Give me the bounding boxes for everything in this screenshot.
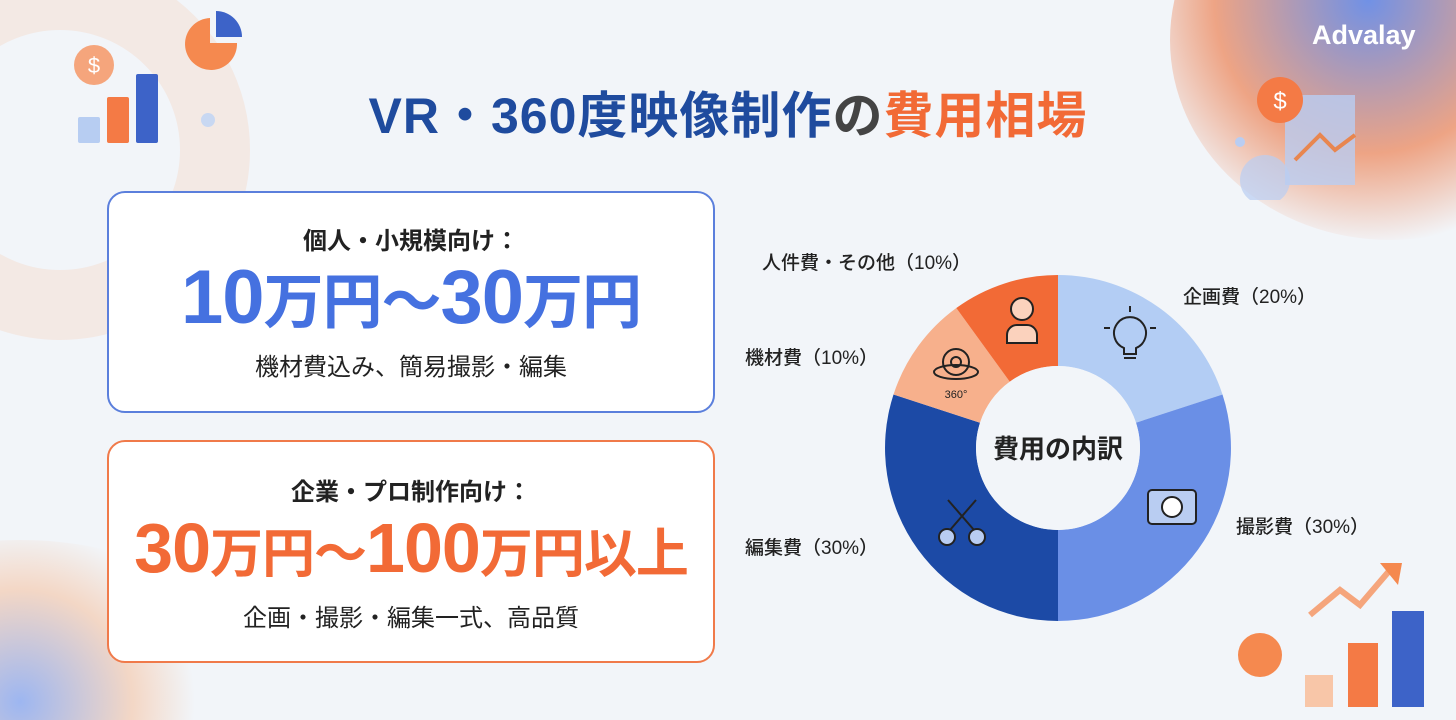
icon: top-left finance graphics — [74, 11, 242, 143]
text: 編集費（30%） — [745, 538, 878, 559]
icon: top-right chart: $ — [1273, 88, 1287, 115]
description: 企画・撮影・編集一式、高品質 — [243, 605, 579, 632]
donut chart: 費用の内訳 — [993, 434, 1123, 464]
price: 30万円～100万円以上 — [134, 509, 688, 587]
text: 企画費（20%） — [1183, 287, 1316, 308]
icon: bottom-right growth chart — [1238, 563, 1424, 707]
icon: scissors — [939, 500, 985, 545]
icon: 360 camera: 360° — [945, 389, 967, 401]
heading: 企業・プロ制作向け： — [291, 479, 531, 506]
text: 機材費（10%） — [745, 348, 878, 369]
icon: person — [1007, 298, 1037, 343]
icon: top-right chart — [1235, 77, 1356, 200]
text: 撮影費（30%） — [1236, 517, 1369, 538]
price: 10万円～30万円 — [181, 255, 641, 340]
icon: bulb — [1104, 306, 1156, 358]
description: 機材費込み、簡易撮影・編集 — [255, 354, 567, 381]
title: VR・360度映像制作の費用相場 — [369, 88, 1087, 144]
logo: Advalay — [1312, 20, 1416, 50]
icon: camera — [1148, 490, 1196, 524]
panel: personal/small — [107, 191, 715, 413]
panel: enterprise/pro — [107, 440, 715, 663]
labels: 人件費・その他（10%） — [762, 253, 971, 274]
icon: top-left finance graphics: $ — [88, 53, 100, 78]
heading: 個人・小規模向け： — [303, 228, 519, 255]
icon: 360 camera — [934, 349, 978, 401]
